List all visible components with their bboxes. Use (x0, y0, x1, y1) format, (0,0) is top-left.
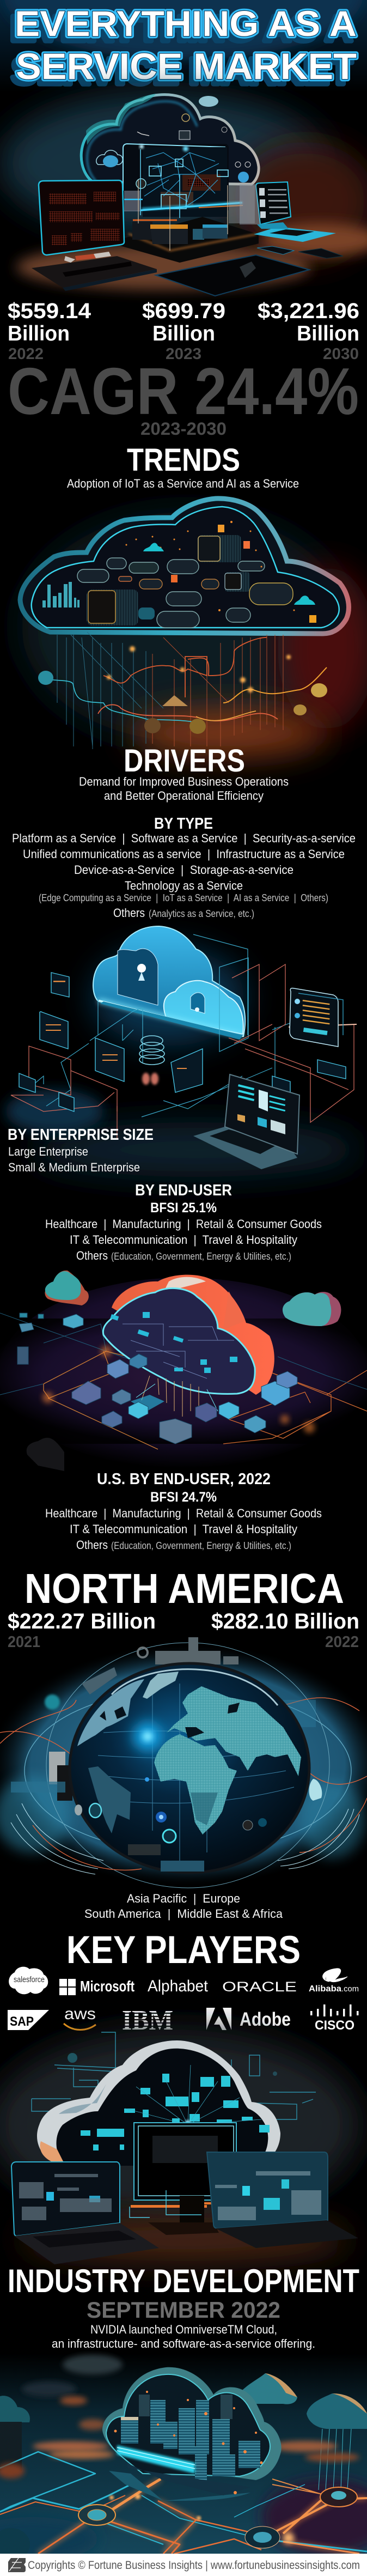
U.S. by end-user (45, 1471, 322, 1552)
logo: Cisco: CISCO (315, 2018, 354, 2033)
stat: 2022: Billion (8, 322, 70, 345)
city cloud (102, 2367, 282, 2501)
logo: AWS (64, 2005, 96, 2030)
icon: Fortune Business Insights logo (8, 2558, 26, 2572)
key players heading: KEY PLAYERS (66, 1929, 301, 1972)
orbit rings (0, 1643, 367, 1888)
drivers: Demand for Improved Business Operations (79, 775, 289, 788)
central screen (123, 144, 229, 218)
logo: Alibaba: Alibaba (309, 1984, 341, 1994)
by type: Device-as-a-Service | Storage-as-a-service (74, 863, 293, 877)
U.S. by end-user: Others (76, 1538, 108, 1552)
title: EVERYTHING AS A (15, 3, 357, 44)
logo: salesforce: salesforce (14, 1975, 45, 1984)
trends heading: Adoption of IoT as a Service and AI as a Service (67, 477, 299, 490)
by enterprise size: Large Enterprise (8, 1145, 88, 1158)
right monitor (240, 182, 336, 242)
drivers (79, 743, 289, 803)
logo: Microsoft (59, 1978, 134, 1995)
title: EVERYTHING AS A (15, 3, 357, 44)
circuit traces (0, 2452, 367, 2554)
server boxes (87, 535, 250, 625)
logo: AWS: aws (64, 2005, 96, 2023)
title: SERVICE MARKET (11, 51, 352, 92)
by type: (Analytics as a Service, etc.) (149, 908, 254, 919)
logo: Microsoft: Microsoft (80, 1978, 134, 1995)
by enterprise size (8, 1126, 154, 1174)
stat: 2023 (142, 299, 225, 363)
wire frames (32, 2032, 316, 2133)
stat: 2030: 2030 (323, 345, 359, 363)
other regions: Asia Pacific | Europe (127, 1892, 240, 1905)
bar chart (42, 582, 79, 607)
U.S. by end-user: IT & Telecommunication | Travel & Hospitality (70, 1522, 297, 1536)
trends heading (67, 442, 299, 490)
city rim (82, 1637, 238, 1694)
trends heading: TRENDS (127, 442, 240, 478)
data cards (81, 2074, 270, 2150)
center monitor (130, 2123, 236, 2235)
north america: $222.27 Billion (8, 1609, 156, 1633)
title: SERVICE MARKET (16, 46, 357, 87)
data pods (77, 558, 293, 628)
drivers: and Better Operational Efficiency (104, 789, 264, 803)
industry development: an infrastructure- and software-as-a-service offering. (52, 2337, 315, 2350)
U.S. by end-user: BFSI 24.7% (150, 1490, 217, 1505)
illustration: globe (0, 1637, 367, 1888)
logo: Alphabet: Alphabet (148, 1977, 209, 1995)
stat: 2030: Billion (297, 322, 359, 345)
continents (77, 1672, 301, 1834)
other regions: South America | Middle East & Africa (84, 1907, 283, 1921)
hanging nodes (38, 671, 327, 734)
logo: Adobe: Adobe (240, 2009, 291, 2030)
stat: 2030: $3,221.96 (258, 299, 359, 323)
illustration: cloud with computers (0, 93, 367, 296)
by end-user: BFSI 25.1% (150, 1200, 217, 1216)
globe body (70, 1663, 309, 1873)
right laptop (207, 2152, 358, 2248)
cloud (37, 2040, 280, 2166)
laptop (193, 1074, 299, 1169)
logo: Adobe (206, 2008, 291, 2030)
U.S. by end-user: (Education, Government, Energy & Utilities, etc.) (111, 1540, 291, 1551)
stat: 2022: $559.14 (8, 299, 91, 323)
cloud (81, 94, 259, 184)
logo: Alibaba: .com (341, 1984, 359, 1994)
circuit lines (0, 1313, 367, 1449)
right screen panel (290, 988, 343, 1047)
database (139, 1036, 164, 1065)
by type (12, 815, 356, 920)
by end-user: IT & Telecommunication | Travel & Hospitality (70, 1233, 297, 1247)
logo: Oracle: ORACLE (222, 1979, 297, 1995)
bench and servers (118, 180, 259, 263)
tablet and phones (156, 246, 343, 296)
industry development: NVIDIA launched OmniverseTM Cloud, (90, 2323, 277, 2336)
illustration: cloud with laptops (0, 2030, 359, 2264)
lower panels (128, 1844, 204, 1872)
logo: Alibaba (309, 1969, 359, 1994)
footer bar (0, 2554, 367, 2576)
stat: 2030 (258, 299, 359, 363)
by end-user: Healthcare | Manufacturing | Retail & Consumer Goods (45, 1217, 322, 1231)
blurred background clouds (0, 2355, 367, 2490)
small panels (19, 973, 346, 1111)
illustration: city in cloud on circuit board (0, 2354, 367, 2561)
illustration: cloud with data pods and circuit (20, 499, 367, 757)
title: SERVICE MARKET (16, 46, 357, 87)
circuit (49, 632, 327, 749)
U.S. by end-user: Healthcare | Manufacturing | Retail & Consumer Goods (45, 1506, 322, 1520)
stat: 2022: 2022 (8, 345, 44, 363)
header background (0, 0, 367, 93)
left laptop (11, 2162, 159, 2264)
by type: BY TYPE (154, 815, 213, 833)
left monitor (32, 180, 157, 291)
side panels (11, 1700, 322, 1801)
U.S. by end-user: U.S. BY END-USER, 2022 (97, 1471, 271, 1488)
title (10, 3, 357, 92)
by end-user: Others (76, 1249, 108, 1262)
stat: 2023: $699.79 (142, 299, 225, 323)
dim foreground cloud (27, 1438, 64, 1471)
by type: Technology as a Service (125, 879, 243, 892)
circuit nodes (0, 2463, 357, 2561)
north america: 2021 (8, 1633, 40, 1651)
by type: Others (113, 906, 145, 920)
north america: $282.10 Billion (211, 1609, 359, 1633)
glowing clouds (93, 926, 245, 1040)
illustration: isometric cloud with servers (0, 1271, 367, 1471)
wireframe panels (27, 934, 294, 1117)
globe markers (75, 1777, 267, 1843)
logo: SAP (8, 2010, 49, 2030)
other regions (84, 1892, 283, 1921)
stat: 2023: 2023 (166, 345, 201, 363)
by enterprise size: BY ENTERPRISE SIZE (8, 1126, 154, 1144)
by enterprise size: Small & Medium Enterprise (8, 1161, 140, 1174)
small clouds (45, 1271, 341, 1326)
by end-user: BY END-USER (135, 1182, 232, 1199)
title: EVERYTHING AS A (10, 8, 352, 48)
mini clouds (143, 543, 315, 605)
server blocks (17, 1313, 297, 1444)
cloud outline (20, 499, 348, 634)
small cloud icon (96, 150, 123, 167)
orange squares (125, 521, 316, 623)
logo: IBM: IBM (122, 2005, 173, 2036)
by end-user (45, 1182, 322, 1262)
stat: 2023: Billion (152, 322, 215, 345)
market statistics (8, 299, 359, 363)
logo: salesforce (9, 1967, 48, 1994)
buildings (121, 2395, 260, 2483)
logo: Cisco (310, 2004, 358, 2033)
stat: 2022 (8, 299, 91, 363)
north america (8, 1565, 359, 1651)
logos (8, 1967, 359, 2036)
illustration: isometric cloud network (5, 926, 359, 1177)
CAGR: 2023-2030 (140, 419, 227, 439)
title: SERVICE MARKET (16, 46, 357, 87)
by type: Unified communications as a service | Infrastructure as a Service (23, 847, 345, 861)
drivers: DRIVERS (124, 743, 245, 779)
main cloud (103, 1275, 274, 1417)
north america: 2022 (325, 1633, 359, 1651)
industry development (8, 2263, 359, 2350)
by end-user: (Education, Government, Energy & Utilities, etc.) (111, 1251, 291, 1262)
industry development: SEPTEMBER 2022 (87, 2297, 280, 2323)
logo: SAP: SAP (10, 2014, 34, 2029)
title: EVERYTHING AS A (15, 3, 357, 44)
